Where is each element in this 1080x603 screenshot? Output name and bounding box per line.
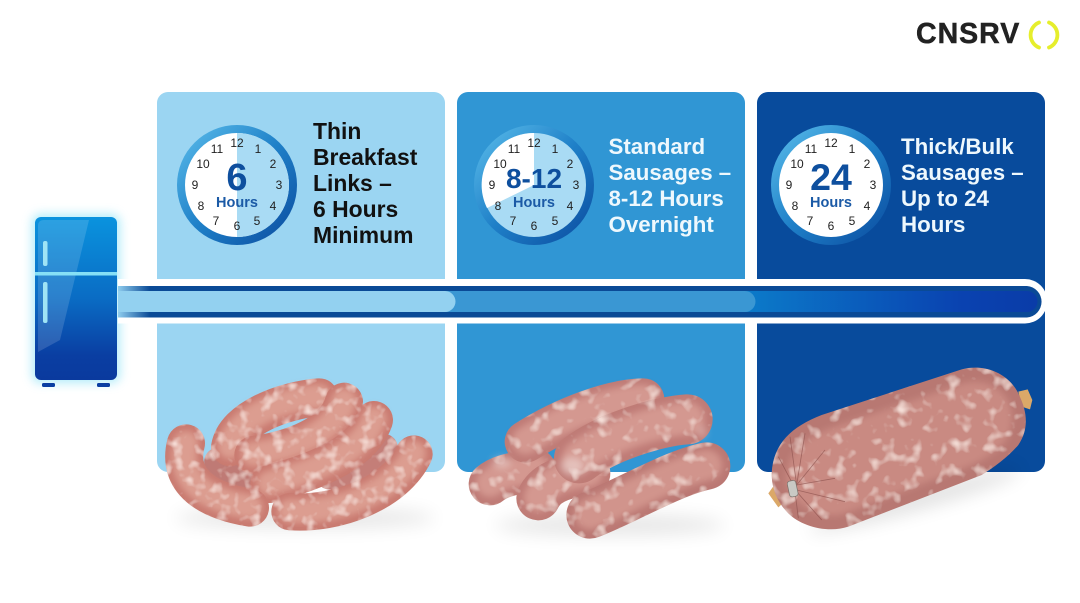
panel: thin breakfast links: [157, 92, 445, 472]
metal clip: [787, 480, 799, 497]
clock: 8-12 hours: 6: [531, 219, 538, 233]
panel title: thin breakfast links: Breakfast: [313, 144, 418, 170]
clock: 6 hours: 10: [196, 157, 210, 171]
panel: standard sausages: [457, 92, 745, 472]
clock: 24 hours: 7: [807, 214, 814, 228]
clock: 6 hours: 11: [211, 142, 224, 156]
panel title: standard sausages: Overnight: [608, 212, 714, 237]
clock: 8-12 hours: 5: [552, 214, 559, 228]
clock: 24 hours: 3: [870, 178, 877, 192]
pleats at tied end: [778, 433, 845, 520]
panel title: thick bulk sausages: Sausages –: [901, 160, 1024, 185]
clock: 8-12 hours: 4: [567, 199, 574, 213]
clock: 6 hours: 6: [234, 219, 241, 233]
clock: 8-12 hours: 3: [573, 178, 580, 192]
panel title: standard sausages: Standard: [608, 134, 705, 159]
clock: 6 hours: 5: [254, 214, 261, 228]
clock: 8-12 hours: 11: [508, 142, 521, 156]
clock: 24 hours: 2: [864, 157, 871, 171]
clock: 6 hours: 7: [213, 214, 220, 228]
sausages: thin breakfast links: [175, 396, 435, 528]
clock: 6 hours: 1: [255, 142, 262, 156]
clock: 24 hours: 5: [849, 214, 856, 228]
clock: 6 hours: [177, 125, 297, 245]
panel title: standard sausages: 8-12 Hours: [608, 186, 724, 211]
clock: 24 hours: Hours: [810, 195, 852, 211]
logo ring: [1031, 22, 1057, 48]
panel title: thick bulk sausages: Thick/Bulk: [901, 134, 1014, 159]
bar segment: 24 hours: [740, 291, 1038, 312]
sausages: standard: [490, 398, 725, 535]
clock: 8-12 hours: 7: [510, 214, 517, 228]
clock: 6 hours: 3: [276, 178, 283, 192]
clock: 24 hours: 24: [810, 156, 852, 198]
panel title: thin breakfast links: Thin: [313, 118, 361, 144]
refrigerator icon: [32, 214, 120, 387]
clock: 24 hours: [771, 125, 891, 245]
clock: 6 hours: 4: [270, 199, 277, 213]
logo: CNSRV: CNSRV: [916, 18, 1020, 50]
clock: 6 hours: Hours: [216, 195, 258, 211]
clock: 6 hours: 2: [270, 157, 277, 171]
panel title: thin breakfast links: 6 Hours: [313, 196, 398, 222]
clock: 8-12 hours: 1: [552, 142, 559, 156]
clock: 6 hours: 6: [226, 157, 248, 199]
sausage: thick bulk chub: [768, 368, 1032, 540]
clock: 8-12 hours: 10: [493, 157, 507, 171]
clock: 24 hours: 8: [792, 199, 799, 213]
clock: 8-12 hours: 8-12: [506, 163, 562, 194]
clock: 8-12 hours: 8: [495, 199, 502, 213]
panel title: standard sausages: Sausages –: [608, 160, 731, 185]
clock: 6 hours: 9: [192, 178, 199, 192]
clock: 24 hours: 1: [849, 142, 856, 156]
clock: 6 hours: 8: [198, 199, 205, 213]
clock: 24 hours: 6: [828, 219, 835, 233]
clock: 6 hours: 12: [230, 136, 244, 150]
panel: thick bulk sausages: [757, 92, 1045, 472]
clock: 8-12 hours: 9: [489, 178, 496, 192]
clock: 8-12 hours: [474, 125, 594, 245]
panel title: thin breakfast links: Links –: [313, 170, 392, 196]
panel title: thick bulk sausages: Hours: [901, 212, 965, 237]
clock: 24 hours: 10: [790, 157, 804, 171]
panel title: thin breakfast links: Minimum: [313, 222, 413, 248]
clock: 24 hours: 4: [864, 199, 871, 213]
clock: 8-12 hours: 2: [567, 157, 574, 171]
bar segment: 6 hours: [118, 291, 456, 312]
timeline bar: [118, 279, 1047, 324]
bar segment: 8-12 hours: [440, 291, 756, 312]
clock: 8-12 hours: 12: [527, 136, 541, 150]
clock: 24 hours: 9: [786, 178, 793, 192]
panel title: thick bulk sausages: Up to 24: [901, 186, 990, 211]
clock: 8-12 hours: Hours: [513, 195, 555, 211]
clock: 24 hours: 11: [805, 142, 818, 156]
clock: 24 hours: 12: [824, 136, 838, 150]
